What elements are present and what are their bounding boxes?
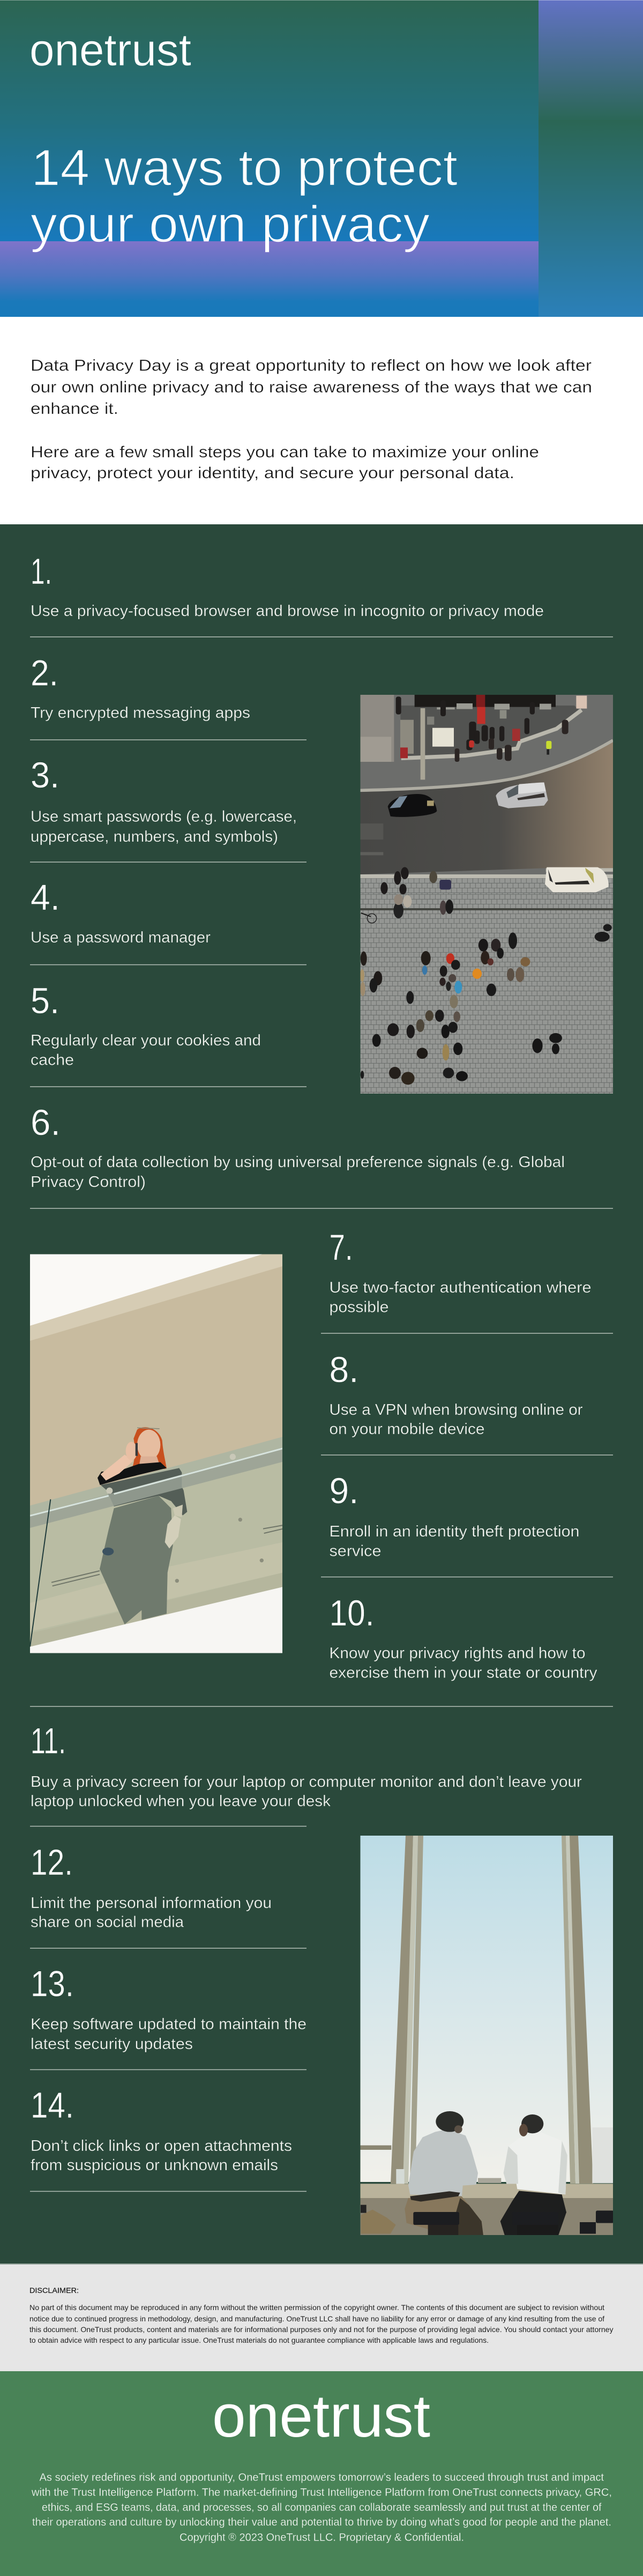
footer text: their operations and culture by unlocking their value and potential to thrive by doing what’s good for people and the planet. [32, 2516, 611, 2528]
disclaimer text: to obtain advice with respect to any particular issue. OneTrust materials do not guarantee compliance with applicable laws and regulations. [29, 2336, 489, 2344]
step 1: Use a privacy-focused browser and browse in incognito or privacy mode [31, 603, 544, 620]
photo: woman on the phone behind a glass balcony [30, 1254, 283, 1655]
title: your own privacy [31, 196, 430, 253]
step 12: Limit the personal information you [31, 1895, 272, 1912]
step 13 [30, 1963, 306, 2069]
disclaimer text [29, 2303, 613, 2344]
step 13: Keep software updated to maintain the [31, 2016, 306, 2033]
step 1 [30, 551, 613, 637]
step 11 [30, 1721, 582, 1826]
text block: introduction: our own online privacy and to raise awareness of the ways that we can [31, 378, 592, 396]
step 11: Buy a privacy screen for your laptop or computer monitor and don’t leave your [31, 1773, 582, 1791]
disclaimer text: this document. OneTrust products, content and materials are for informational purposes only and not for the purpose of providing legal advice. You should contact your attorney [29, 2325, 613, 2334]
step 12: 12. [31, 1842, 73, 1883]
step 8: on your mobile device [329, 1421, 484, 1438]
step 9: 9. [329, 1471, 359, 1511]
step 13: 13. [31, 1963, 74, 2004]
footer text: ethics, and ESG teams, data, and processes, so all companies can collaborate seamlessly and put trust at the center of [42, 2501, 602, 2513]
step 4: 4. [31, 877, 60, 918]
panel: footer [0, 2371, 643, 2576]
figure seen through the glass [101, 1468, 187, 1516]
step 9: Enroll in an identity theft protection [329, 1523, 580, 1540]
text block: introduction: Data Privacy Day is a great opportunity to reflect on how we look after [31, 357, 592, 374]
people near the cafe [396, 696, 535, 750]
text block: introduction: enhance it. [31, 400, 118, 418]
title [31, 139, 458, 253]
footer text: As society redefines risk and opportunity, OneTrust empowers tomorrow’s leaders to succeed through trust and impact [40, 2471, 604, 2483]
text block: introduction: privacy, protect your identity, and secure your personal data. [31, 464, 514, 482]
panel: disclaimer [0, 2263, 643, 2371]
panel: 14 ways list [0, 524, 643, 2263]
step 7: possible [329, 1298, 389, 1316]
logo: onetrust wordmark: onetrust [212, 2382, 430, 2449]
step 10: Know your privacy rights and how to [329, 1645, 585, 1662]
text block: introduction: Here are a few small steps you can take to maximize your online [31, 443, 539, 461]
footer text [31, 2471, 612, 2543]
step 2: Try encrypted messaging apps [31, 704, 250, 722]
step 3: uppercase, numbers, and symbols) [31, 828, 278, 845]
white taxi [545, 867, 609, 892]
lower curb and cobbles [360, 874, 613, 878]
step 5 [30, 981, 306, 1087]
step 7: Use two-factor authentication where [329, 1279, 592, 1296]
text block: introduction [31, 357, 592, 482]
step 12 [30, 1842, 306, 1948]
disclaimer text: notice due to continued progress in methodology, design, and manufacturing. OneTrust LLC shall have no liability for any error or damage of any kind resulting from the use of [29, 2314, 604, 2323]
step 14: Don’t click links or open attachments [31, 2137, 292, 2155]
step 9 [321, 1471, 613, 1577]
step 6 [30, 1102, 613, 1208]
step 7: 7. [329, 1227, 353, 1268]
step 11: laptop unlocked when you leave your desk [31, 1793, 331, 1810]
footer text: with the Trust Intelligence Platform. The market-defining Trust Intelligence Platform from OneTrust connects privacy, GRC, [31, 2486, 612, 2498]
disclaimer text: No part of this document may be reproduced in any form without the written permission of the copyright owner. The contents of this document are subject to revision without [29, 2303, 604, 2312]
stools and bag [413, 2212, 459, 2225]
step 8: 8. [329, 1349, 359, 1390]
step 1: 1. [31, 551, 52, 592]
step 8: Use a VPN when browsing online or [329, 1401, 583, 1419]
step 5: cache [31, 1052, 74, 1069]
step 4: Use a password manager [31, 929, 211, 946]
silver car [496, 782, 548, 808]
step 8 [321, 1349, 613, 1455]
black car [388, 794, 437, 817]
step 14 [30, 2085, 306, 2192]
step 3 [30, 755, 306, 862]
step 2 [30, 653, 306, 740]
step 6: 6. [31, 1102, 61, 1143]
logo: onetrust wordmark: onetrust [29, 25, 191, 75]
photo: aerial view of pedestrians and cars on a plaza [360, 695, 613, 1094]
right man [500, 2191, 566, 2236]
people on the curb [394, 871, 401, 885]
step 3: 3. [31, 755, 59, 796]
step 10: exercise them in your state or country [329, 1664, 597, 1681]
step 9: service [329, 1543, 382, 1560]
step 4 [30, 877, 306, 965]
step 14: 14. [31, 2085, 74, 2126]
step 6: Opt-out of data collection by using universal preference signals (e.g. Global [31, 1154, 565, 1171]
step 10 [30, 1593, 613, 1706]
step 2: 2. [31, 653, 58, 694]
road [360, 741, 613, 874]
disclaimer heading: DISCLAIMER: [29, 2286, 79, 2295]
step 5: Regularly clear your cookies and [31, 1032, 261, 1049]
footer text: Copyright ® 2023 OneTrust LLC. Proprietary & Confidential. [180, 2532, 464, 2543]
left man [405, 2196, 469, 2229]
panel: header banner [0, 0, 643, 317]
step 10: 10. [329, 1593, 374, 1634]
floor ledge [30, 1587, 283, 1655]
hand rail [30, 1447, 283, 1528]
photo: two men at a window counter [360, 1836, 614, 2236]
step 5: 5. [31, 981, 59, 1021]
step 14: from suspicious or unknown emails [31, 2157, 278, 2174]
step 13: latest security updates [31, 2036, 193, 2053]
title: 14 ways to protect [31, 139, 458, 196]
step 12: share on social media [31, 1914, 184, 1931]
step 6: Privacy Control) [31, 1174, 146, 1191]
glass balustrade [30, 1462, 282, 1633]
step 7 [321, 1227, 613, 1333]
step 3: Use smart passwords (e.g. lowercase, [31, 808, 297, 826]
step 11: 11. [31, 1721, 66, 1762]
